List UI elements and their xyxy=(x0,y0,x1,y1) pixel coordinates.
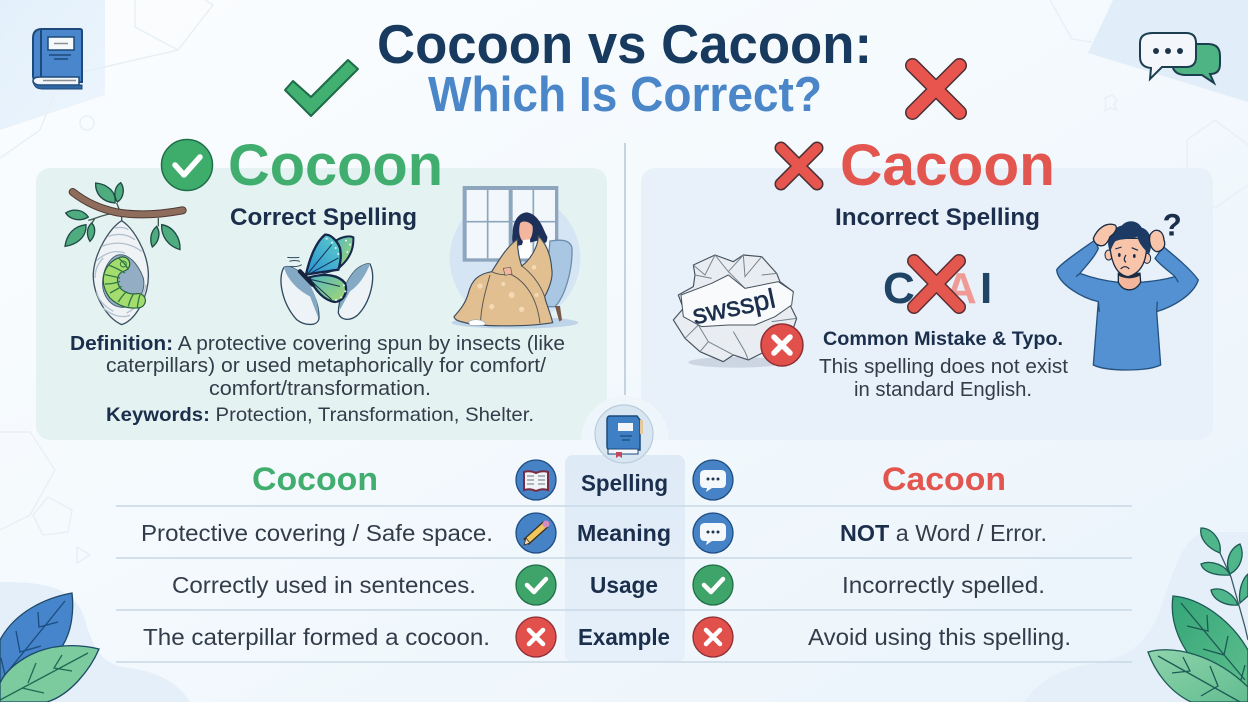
subheading: correct spelling: Correct Spelling xyxy=(230,204,417,231)
table header: Cacoon: Cacoon xyxy=(882,461,1006,497)
definition text: Definition: A protective covering spun by insects (like xyxy=(70,333,565,355)
panel background xyxy=(36,168,607,440)
crossed out letters: I xyxy=(980,264,992,313)
heading: Cocoon: Cocoon xyxy=(228,133,443,198)
icon: speech bubbles top right xyxy=(1140,33,1220,83)
heading: Cacoon: Cacoon xyxy=(840,133,1055,198)
icon: book top left xyxy=(33,29,82,89)
panel: cocoon xyxy=(36,133,607,440)
panel: cacoon xyxy=(641,133,1213,440)
top right corner shape xyxy=(1088,0,1248,102)
center column band xyxy=(565,455,685,662)
row labels xyxy=(577,470,671,650)
crossed out letters: C xyxy=(883,264,915,313)
illustration: confused man xyxy=(1057,208,1198,370)
crossed out letters xyxy=(883,261,992,313)
explanation text: This spelling does not exist xyxy=(819,356,1068,378)
icon: red x badge xyxy=(761,324,803,366)
right column text: NOT a Word / Error. xyxy=(840,520,1047,546)
icon: large check xyxy=(285,60,358,116)
title xyxy=(377,13,872,122)
center divider xyxy=(624,143,626,395)
icon: check usage right xyxy=(693,565,733,605)
row labels: Usage xyxy=(590,572,658,598)
illustration: crumpled paper xyxy=(673,255,797,368)
common mistake text: Common Mistake & Typo. xyxy=(823,329,1063,350)
icon: check circle xyxy=(162,140,212,190)
icon: red cross xyxy=(781,148,817,184)
icon: check usage left xyxy=(516,565,556,605)
icon: large cross xyxy=(912,66,960,112)
keywords text: Keywords: Protection, Transformation, Shelter. xyxy=(106,404,534,426)
comparison table xyxy=(116,396,1132,662)
left column text: Protective covering / Safe space. xyxy=(141,520,493,546)
illustration: cocoon on a branch xyxy=(65,183,183,325)
top left corner shape xyxy=(0,0,105,130)
icon: chat bubble spelling xyxy=(693,460,733,500)
illustration: crumpled paper: swsspl xyxy=(689,282,778,330)
row labels: Meaning xyxy=(577,520,671,546)
illustration: woman in blanket xyxy=(450,186,580,329)
title: Cocoon vs Cacoon: xyxy=(377,13,872,75)
title: Which Is Correct? xyxy=(428,68,822,122)
right column text xyxy=(808,520,1071,650)
bottom left blob xyxy=(0,582,190,702)
definition text xyxy=(70,333,565,400)
explanation text xyxy=(819,356,1068,401)
icon: center book badge xyxy=(581,396,669,463)
bottom right blob xyxy=(1025,532,1248,702)
subheading: incorrect spelling: Incorrect Spelling xyxy=(835,204,1040,231)
decoration: bottom right leaves xyxy=(1148,528,1248,702)
definition text: caterpillars) or used metaphorically for comfort/ xyxy=(106,355,546,377)
left column text: Correctly used in sentences. xyxy=(172,572,476,598)
left column text: The caterpillar formed a cocoon. xyxy=(143,624,490,650)
crossed out letters: A xyxy=(945,264,977,313)
row labels: Spelling xyxy=(581,470,668,496)
icon: open book xyxy=(516,460,556,500)
icon: chat bubble meaning xyxy=(693,513,733,553)
right column text: Incorrectly spelled. xyxy=(842,572,1045,598)
definition text: comfort/transformation. xyxy=(209,378,431,400)
illustration: confused man: ? xyxy=(1163,208,1182,243)
icon: pencil xyxy=(516,513,556,553)
illustration: butterfly emerging xyxy=(281,235,373,324)
panel background xyxy=(641,168,1213,440)
left column text xyxy=(141,520,493,650)
table header: Cocoon: Cocoon xyxy=(252,461,378,497)
icon: x example left xyxy=(516,617,556,657)
right column text: Avoid using this spelling. xyxy=(808,624,1071,650)
decoration: bottom left leaves xyxy=(0,593,99,702)
explanation text: in standard English. xyxy=(854,379,1032,401)
icon: x example right xyxy=(693,617,733,657)
row labels: Example xyxy=(578,624,670,650)
